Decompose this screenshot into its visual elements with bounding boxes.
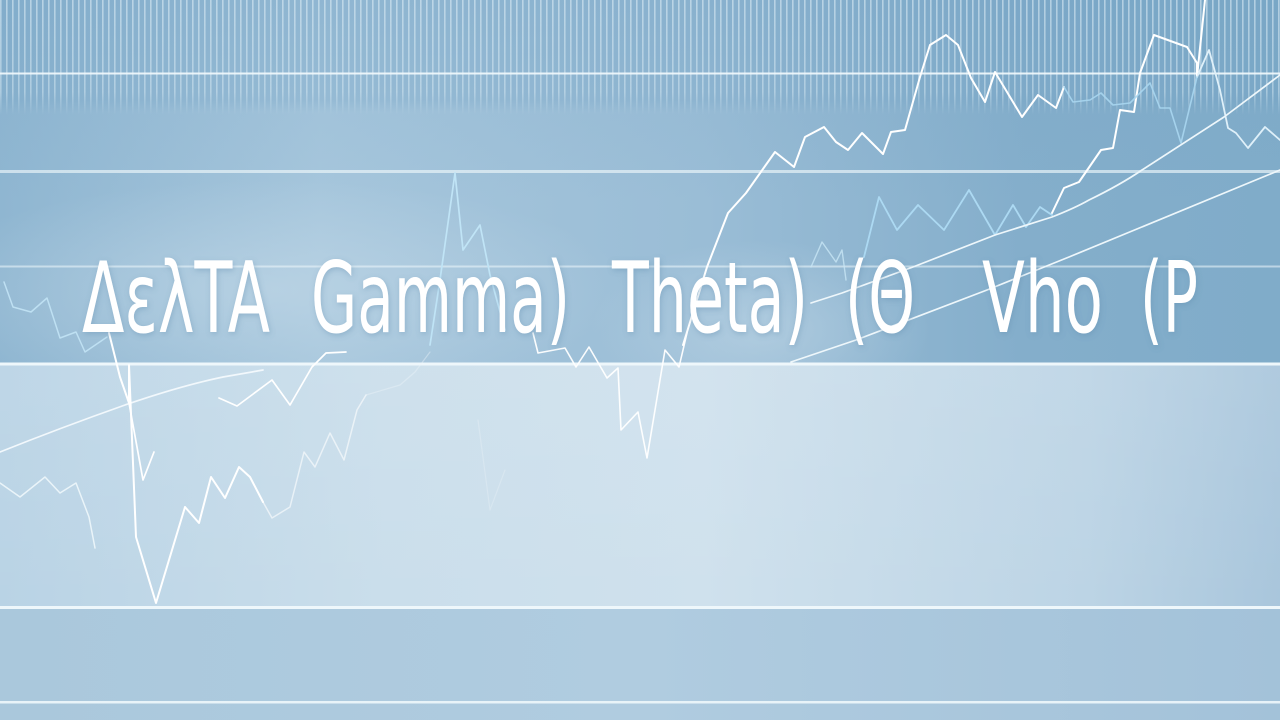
trace: second rising line xyxy=(1052,0,1205,213)
trace: dip continuation faded xyxy=(263,395,366,518)
title word: theta: Theta) xyxy=(611,242,808,356)
background: footer band xyxy=(0,607,1280,720)
trace: panel segment xyxy=(219,352,346,406)
background: lower panel xyxy=(0,364,1280,607)
trend curve: lower xyxy=(791,170,1280,362)
title xyxy=(82,242,1198,356)
vertical stripe band xyxy=(0,0,1280,115)
trace: deep dip white line xyxy=(109,333,263,603)
title word: delta: ΔελTA xyxy=(82,242,270,356)
trace: left light blue line xyxy=(4,282,107,352)
trace: centre dip line xyxy=(533,333,687,458)
trace: faded light blue upper line xyxy=(1064,77,1197,143)
trace: light blue middle line xyxy=(864,190,1052,257)
background: glow at chart centre xyxy=(590,240,930,420)
background: top shading xyxy=(0,0,1280,200)
title word: open P: (P xyxy=(1140,242,1198,356)
trace: right descending line xyxy=(1197,50,1280,148)
trace: faint right panel line xyxy=(478,420,505,510)
background: header band xyxy=(0,0,1280,364)
title word: vho: Vho xyxy=(982,242,1103,356)
title word: gamma: Gamma) xyxy=(311,242,570,356)
trend curve: upper xyxy=(811,75,1280,303)
trend curve: left xyxy=(0,370,263,452)
trace: short secondary dip xyxy=(129,403,154,480)
trace: small line near theta xyxy=(811,242,846,280)
title word: theta symbol: (Θ xyxy=(845,242,915,356)
trace: faint low lines in panel xyxy=(366,352,430,395)
trace: lower left line xyxy=(0,477,95,548)
background: glow behind title xyxy=(0,180,630,400)
trace: light blue spike xyxy=(430,173,505,345)
trace: main rising line xyxy=(683,35,1064,345)
background: lower panel highlight xyxy=(0,364,1280,607)
